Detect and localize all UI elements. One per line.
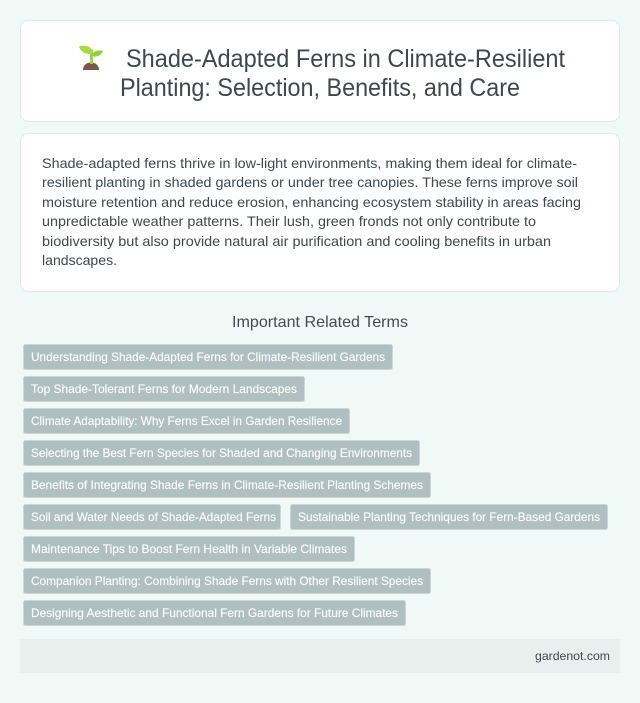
panel: title card <box>20 20 620 122</box>
title text: Shade-Adapted Ferns in Climate-Resilient <box>126 45 565 73</box>
description text: resilient planting in shaded gardens or under tree canopies. These ferns improve soil <box>42 174 578 190</box>
tag list <box>24 344 608 626</box>
heading: important related terms: Important Related Terms <box>232 314 408 331</box>
tag 9 <box>24 568 430 594</box>
tag 4 <box>24 440 420 466</box>
description text: Shade-adapted ferns thrive in low-light environments, making them ideal for climate- <box>42 155 577 171</box>
tag 6: Soil and Water Needs of Shade-Adapted Ferns <box>31 510 276 524</box>
tag 3: Climate Adaptability: Why Ferns Excel in Garden Resilience <box>31 414 342 428</box>
title text <box>120 45 565 102</box>
tag 1 <box>24 344 392 370</box>
tag 1: Understanding Shade-Adapted Ferns for Climate-Resilient Gardens <box>31 350 385 364</box>
tag 7 <box>290 504 608 530</box>
tag 9: Companion Planting: Combining Shade Ferns with Other Resilient Species <box>31 574 423 588</box>
footer: gardenot.com <box>535 649 610 663</box>
footer <box>20 639 620 673</box>
description text <box>42 155 581 268</box>
description text: unpredictable weather patterns. Their lush, green fronds not only contribute to <box>42 213 536 229</box>
tag 4: Selecting the Best Fern Species for Shaded and Changing Environments <box>31 446 412 460</box>
tag 7: Sustainable Planting Techniques for Fern-Based Gardens <box>298 510 600 524</box>
tag 8 <box>24 536 354 562</box>
icon: sprout <box>79 46 103 70</box>
description text: biodiversity but also provide natural air purification and cooling benefits in urban <box>42 233 551 249</box>
title text: Planting: Selection, Benefits, and Care <box>120 74 520 102</box>
tag 2: Top Shade-Tolerant Ferns for Modern Landscapes <box>31 382 297 396</box>
tag 8: Maintenance Tips to Boost Fern Health in Variable Climates <box>31 542 347 556</box>
tag 6 <box>24 504 280 530</box>
tag 5: Benefits of Integrating Shade Ferns in Climate-Resilient Planting Schemes <box>31 478 423 492</box>
tag 10 <box>24 600 406 626</box>
tag 2 <box>24 376 304 402</box>
description text: landscapes. <box>42 252 117 268</box>
tag 3 <box>24 408 350 434</box>
panel: description card <box>20 134 620 292</box>
tag 5 <box>24 472 430 498</box>
tag 10: Designing Aesthetic and Functional Fern Gardens for Future Climates <box>31 606 398 620</box>
description text: moisture retention and reduce erosion, enhancing ecosystem stability in areas facing <box>42 194 581 210</box>
